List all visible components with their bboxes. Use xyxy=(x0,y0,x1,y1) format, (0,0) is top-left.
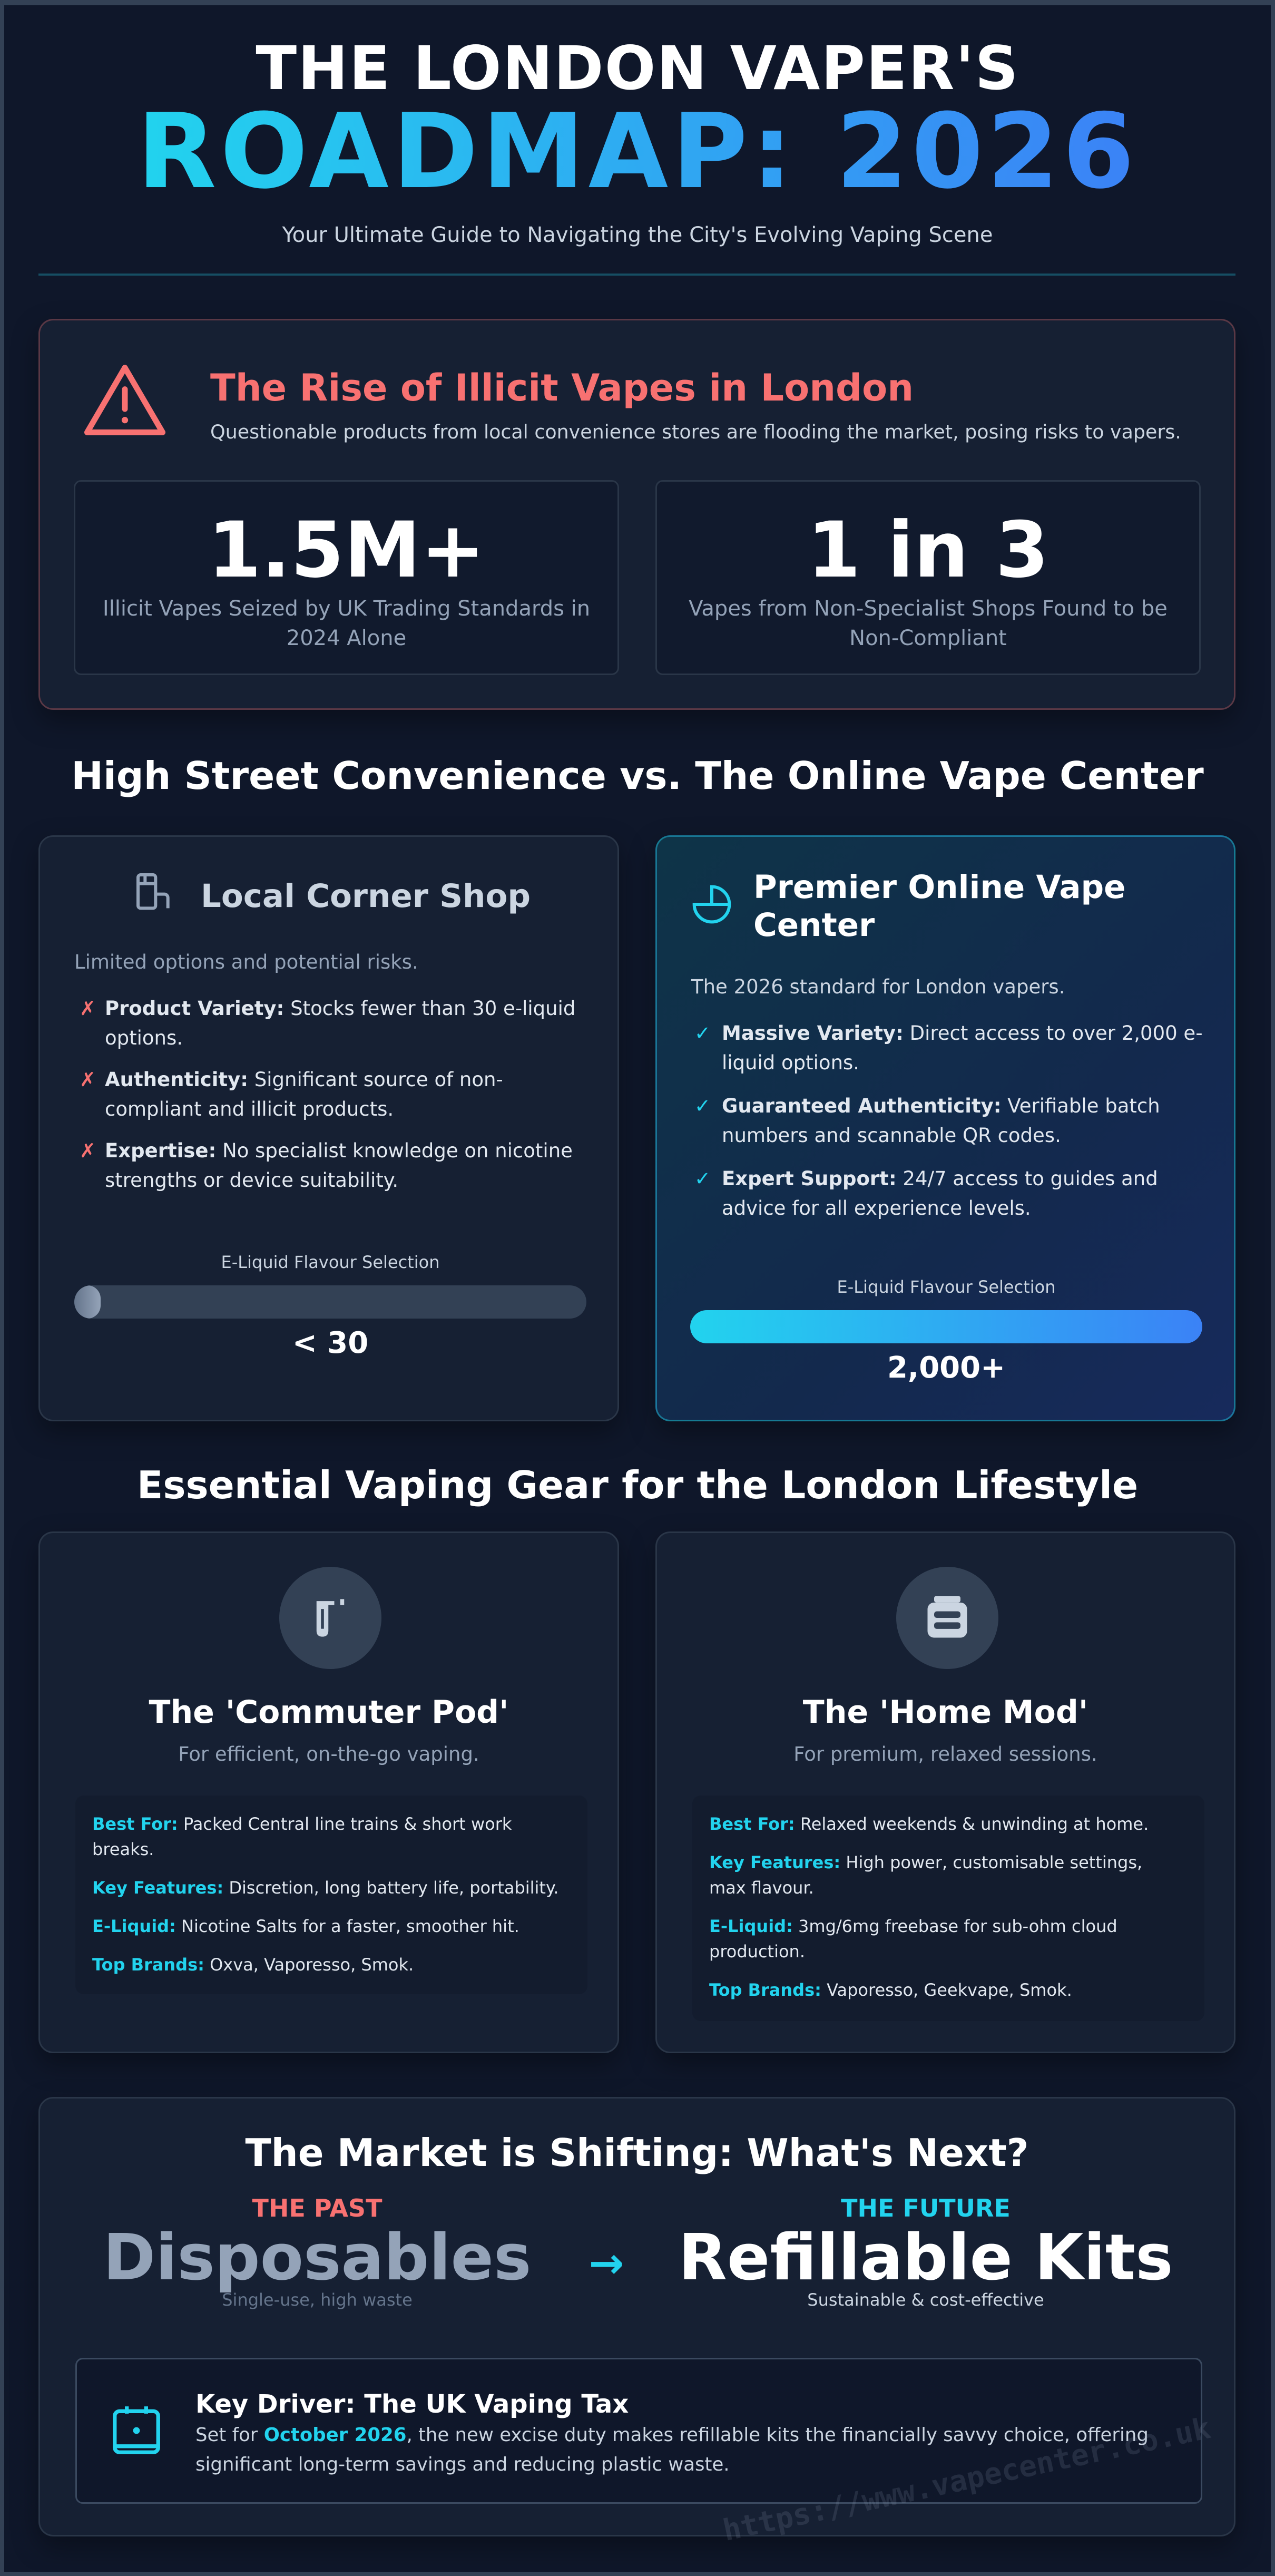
icon: warning xyxy=(84,365,165,435)
panel: online vape center xyxy=(655,835,1235,1421)
stat: 1.5M+: Illicit Vapes Seized by UK Trading Standards in 2024 Alone xyxy=(103,597,590,650)
spec box xyxy=(75,1796,587,1994)
icon: mod xyxy=(896,1567,998,1669)
panel: local corner shop: Limited options and potential risks. xyxy=(74,951,418,973)
panel: illicit vapes xyxy=(38,319,1235,710)
icon: calendar xyxy=(113,2406,160,2454)
future xyxy=(678,2194,1173,2310)
spec box xyxy=(692,1796,1204,2021)
panel: commuter pod xyxy=(38,1531,619,2053)
subtitle: Your Ultimate Guide to Navigating the City's Evolving Vaping Scene xyxy=(282,223,993,247)
stat: 1 in 3 xyxy=(655,480,1201,675)
spec box: Key Features: High power, customisable settings, max flavour. xyxy=(709,1852,1142,1898)
bar chart: selection: E-Liquid Flavour Selection xyxy=(221,1252,439,1272)
past: THE PAST xyxy=(252,2194,382,2222)
panel: online vape center: The 2026 standard for London vapers. xyxy=(691,975,1065,998)
panel: commuter pod: For efficient, on-the-go vaping. xyxy=(178,1743,479,1765)
bar chart: selection xyxy=(74,1252,586,1360)
callout: tax: Set for October 2026, the new excise duty makes refillable kits the financially savvy choice, offering significant long-term savings and reducing plastic waste. xyxy=(195,2424,1149,2475)
past: Disposables xyxy=(103,2221,531,2295)
stat: 1 in 3: Vapes from Non-Specialist Shops Found to be Non-Compliant xyxy=(689,597,1168,650)
future: THE FUTURE xyxy=(841,2194,1011,2222)
future: Sustainable & cost-effective xyxy=(807,2290,1044,2310)
list: risks: Product Variety: Stocks fewer than 30 e-liquid options. xyxy=(105,997,575,1049)
icon: pie xyxy=(692,885,731,923)
heading: gear: Essential Vaping Gear for the London Lifestyle xyxy=(137,1463,1138,1508)
callout: tax xyxy=(75,2358,1202,2504)
spec box: E-Liquid: 3mg/6mg freebase for sub-ohm cloud production. xyxy=(709,1916,1117,1962)
icon: shop xyxy=(136,873,170,910)
arrow: → xyxy=(589,2239,624,2288)
spec box: Top Brands: Oxva, Vaporesso, Smok. xyxy=(92,1955,414,1975)
heading: comparison: High Street Convenience vs. The Online Vape Center xyxy=(71,754,1204,798)
title: roadmap 2026: ROADMAP: 2026 xyxy=(137,92,1138,212)
list: benefits: Expert Support: 24/7 access to guides and advice for all experience levels. xyxy=(722,1167,1158,1219)
list: risks: ✗ xyxy=(80,997,96,1020)
heading: The Rise of Illicit Vapes in London xyxy=(210,366,914,409)
list: benefits xyxy=(694,1022,1203,1219)
list: risks: Authenticity: Significant source of non-compliant and illicit products. xyxy=(105,1068,503,1120)
list: risks: ✗ xyxy=(80,1139,96,1162)
bar chart: selection: 2,000+ xyxy=(887,1351,1005,1385)
spec box: Best For: Relaxed weekends & unwinding at home. xyxy=(709,1814,1149,1834)
list: benefits: ✓ xyxy=(694,1095,711,1117)
bar chart: selection: E-Liquid Flavour Selection xyxy=(837,1277,1055,1297)
spec box: Top Brands: Vaporesso, Geekvape, Smok. xyxy=(709,1980,1072,2000)
list: risks xyxy=(80,997,575,1192)
heading: Premier Online Vape Center xyxy=(753,869,1126,944)
heading: The 'Commuter Pod' xyxy=(149,1694,508,1731)
list: benefits: Massive Variety: Direct access to over 2,000 e-liquid options. xyxy=(722,1022,1203,1074)
list: benefits: ✓ xyxy=(694,1022,711,1045)
heading: The 'Home Mod' xyxy=(803,1694,1088,1731)
spec box: Key Features: Discretion, long battery life, portability. xyxy=(92,1878,559,1898)
icon: pod xyxy=(279,1567,381,1669)
list: risks: Expertise: No specialist knowledge on nicotine strengths or device suitability. xyxy=(105,1139,573,1192)
stat: 1.5M+ xyxy=(74,480,619,675)
bar chart: selection: < 30 xyxy=(292,1326,368,1360)
past: Single-use, high waste xyxy=(222,2290,413,2310)
heading: Local Corner Shop xyxy=(201,877,531,915)
text: Questionable products from local convenience stores are flooding the market, posing risks to vapers. xyxy=(210,421,1181,443)
list: benefits: ✓ xyxy=(694,1167,711,1190)
panel: local corner shop xyxy=(38,835,619,1421)
panel: home mod xyxy=(655,1531,1235,2053)
callout: tax: Key Driver: The UK Vaping Tax xyxy=(195,2389,629,2419)
stat: 1.5M+: 1.5M+ xyxy=(208,505,485,595)
heading: The Market is Shifting: What's Next? xyxy=(245,2131,1029,2175)
stat: 1 in 3: 1 in 3 xyxy=(807,505,1049,595)
bar chart: selection xyxy=(690,1277,1202,1385)
past xyxy=(103,2194,531,2310)
list: risks: ✗ xyxy=(80,1068,96,1091)
title: THE LONDON VAPER'S xyxy=(256,33,1019,103)
panel: home mod: For premium, relaxed sessions. xyxy=(793,1743,1097,1765)
panel: market shift xyxy=(38,2097,1235,2536)
spec box: E-Liquid: Nicotine Salts for a faster, smoother hit. xyxy=(92,1916,519,1936)
future: Refillable Kits xyxy=(678,2221,1173,2295)
spec box: Best For: Packed Central line trains & short work breaks. xyxy=(92,1814,512,1859)
list: benefits: Guaranteed Authenticity: Verifiable batch numbers and scannable QR codes. xyxy=(722,1095,1160,1147)
watermark: https://www.vapecenter.co.uk xyxy=(720,2411,1213,2548)
